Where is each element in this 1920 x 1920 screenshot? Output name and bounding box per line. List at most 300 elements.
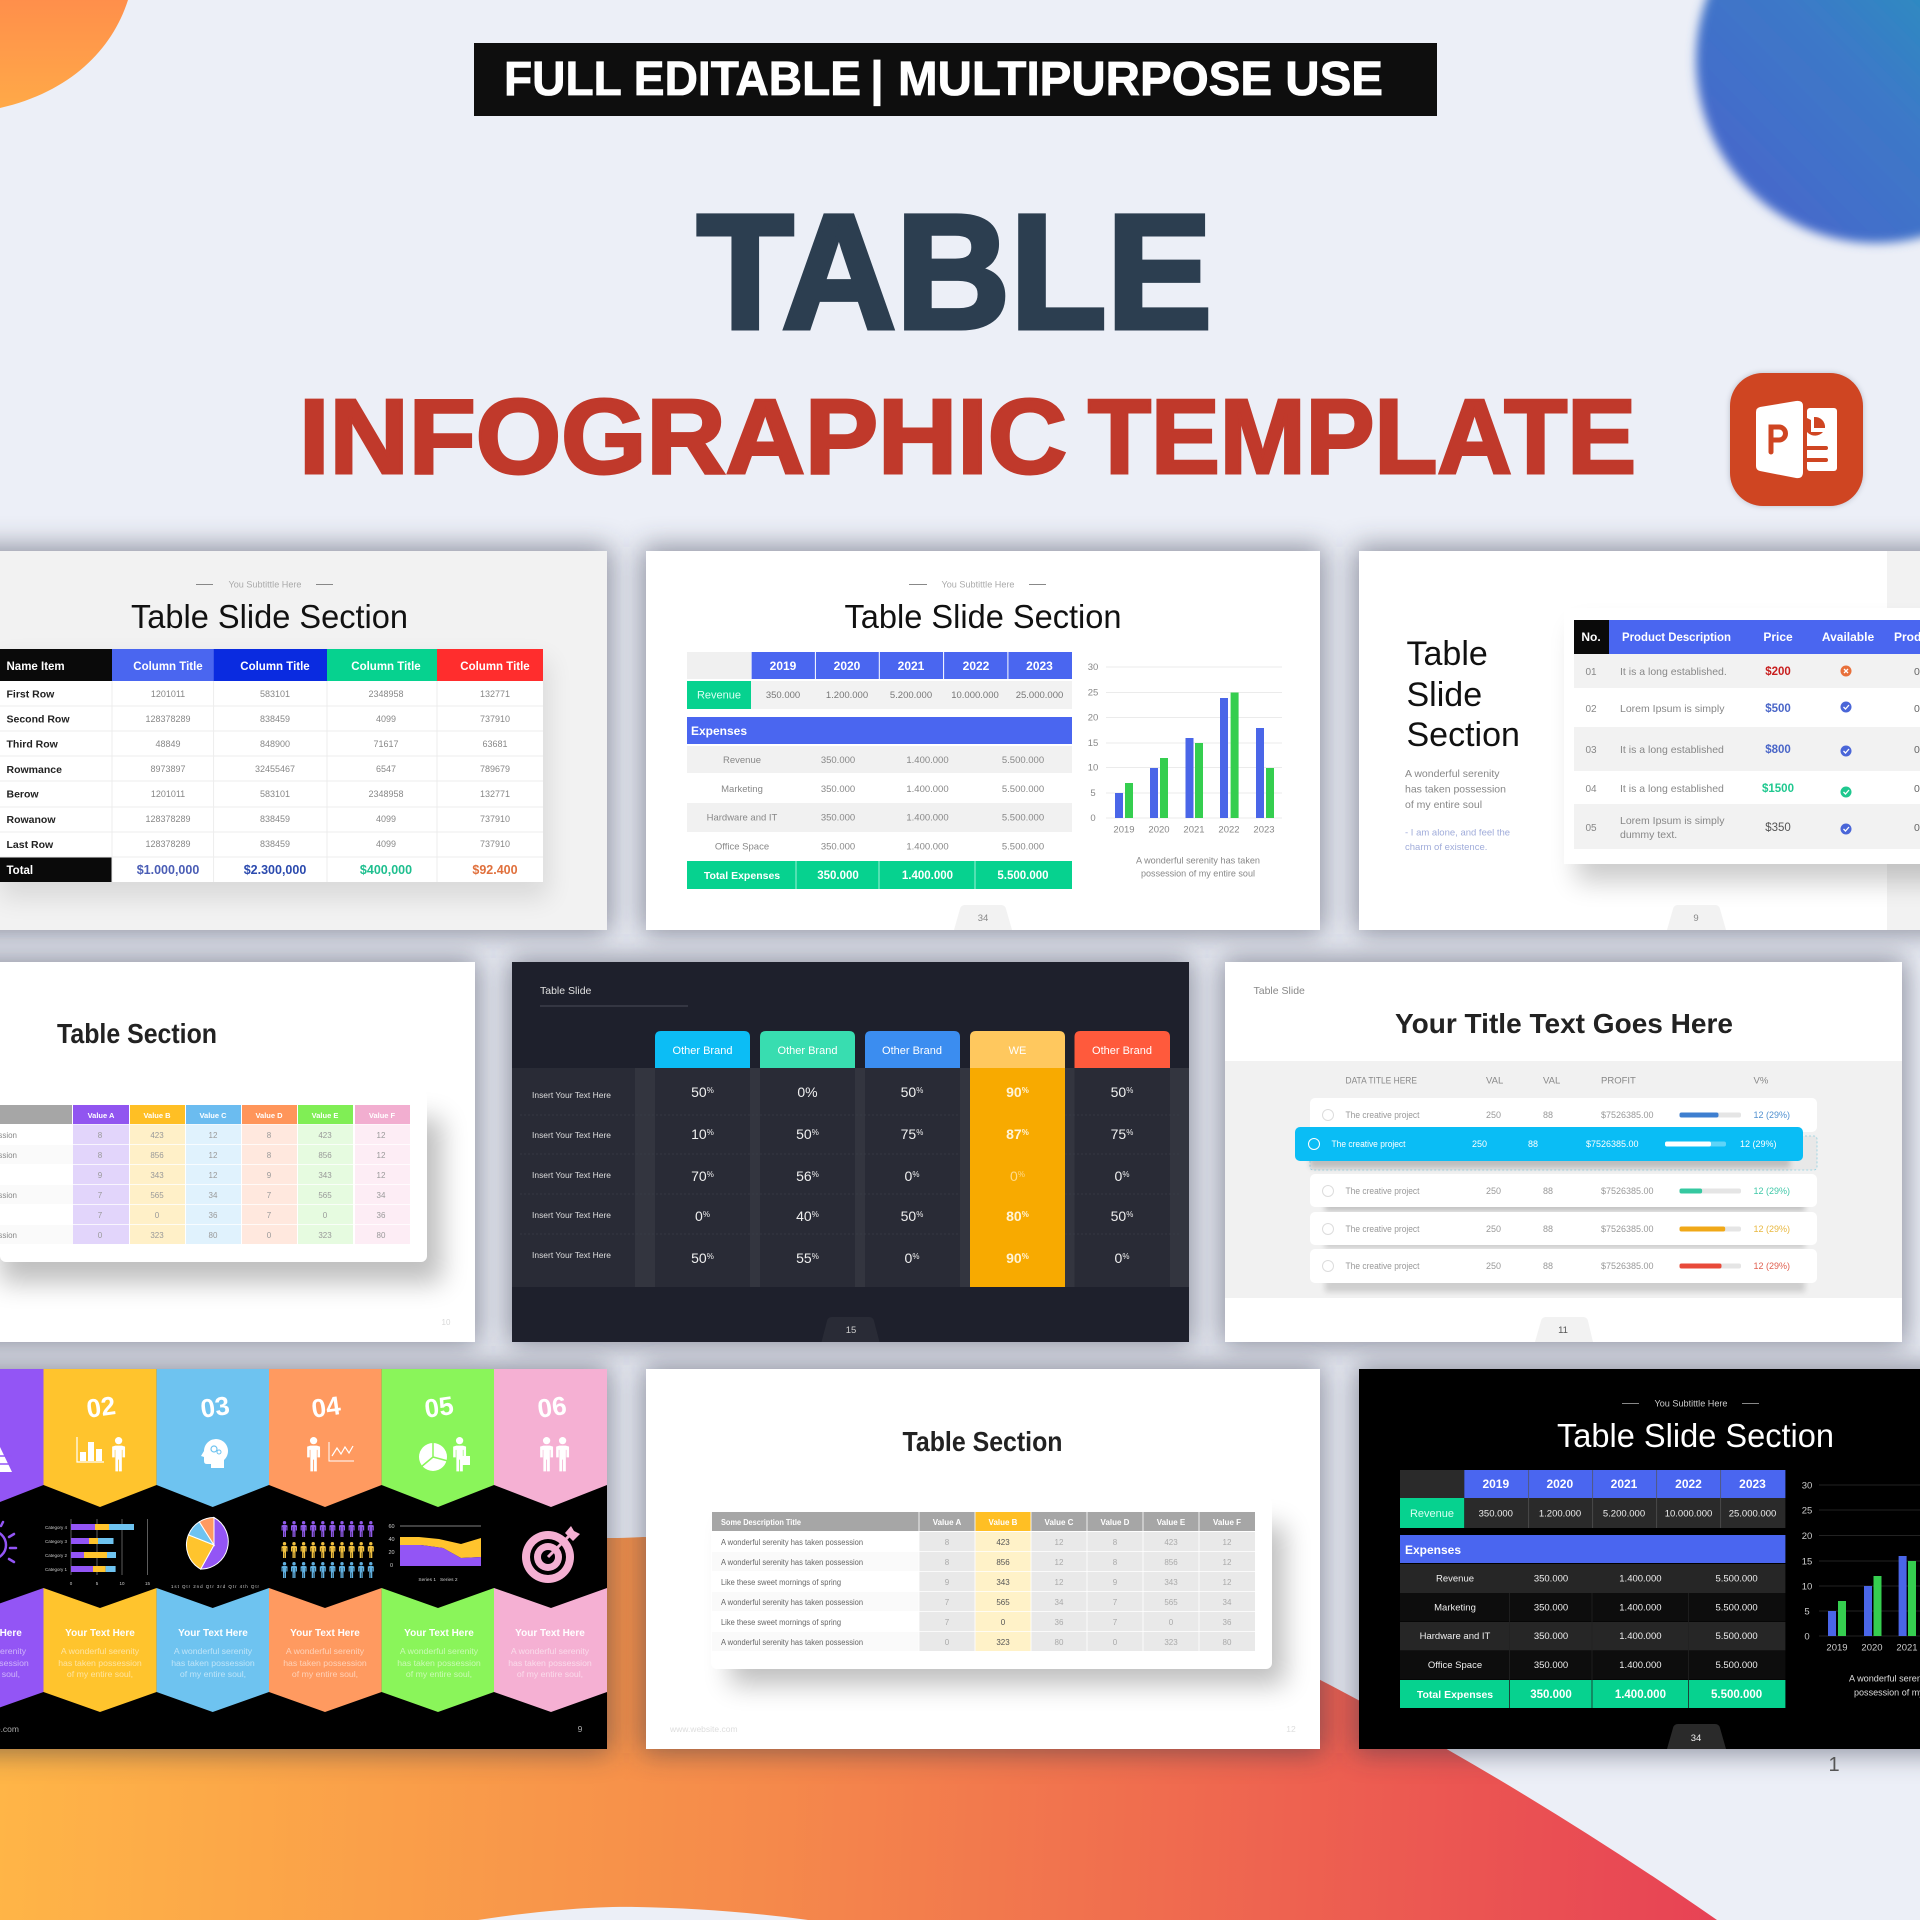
slide 5 table: Insert Your Text Here (532, 1170, 611, 1180)
slide 3 table card: Lorem Ipsum is simply (1620, 703, 1725, 715)
icon: powerpoint logo (1730, 373, 1863, 506)
slide 8 table card: 12 (1223, 1558, 1232, 1567)
slide 5 table: 0 (1010, 1168, 1018, 1184)
chevron numbers: 05 (423, 1390, 455, 1424)
slide 4 table card: 34 (209, 1191, 218, 1200)
slide 6 list: $7526385.00 (1601, 1261, 1654, 1271)
slide 9 table: Office Space (1428, 1660, 1482, 1671)
slide 9 table: 10.000.000 (1665, 1508, 1712, 1520)
banner: full editable: FULL EDITABLE (504, 53, 861, 106)
slide 1 table: Rowanow (6, 814, 56, 826)
slide 4 table card: 343 (318, 1171, 332, 1180)
slide 6 list: $7526385.00 (1601, 1224, 1654, 1234)
slide 6 list: The creative project (1346, 1224, 1420, 1234)
slide 8 table card: 12 (1223, 1578, 1232, 1587)
chart: stacked horizontal bars: Category 4 (45, 1525, 68, 1530)
slide 2 table: Revenue (723, 755, 761, 766)
slide 5 page tab: 15 (846, 1325, 856, 1336)
slide 6 list (1225, 1061, 1902, 1298)
slide 5 table: % (812, 1128, 819, 1137)
slide 8 table card: Value B (989, 1518, 1018, 1527)
slide 5 table: % (1022, 1086, 1029, 1095)
slide 3 table card: $800 (1765, 744, 1791, 756)
chevron captions: Your Text Here (178, 1628, 248, 1639)
slide 3 table card: dummy text. (1620, 829, 1677, 841)
slide 1 table: 848900 (260, 739, 290, 749)
slide 4 table card: 856 (150, 1151, 164, 1160)
slide 6 highlighted row: 88 (1528, 1139, 1538, 1149)
slide 3 table card: 05 (1585, 823, 1597, 834)
slide 9 table: 2019 (1482, 1477, 1509, 1491)
chart: stacked horizontal bars: 5 (96, 1581, 99, 1586)
slide 3 table card: 04 (1585, 784, 1597, 795)
slide 6 list: PROFIT (1601, 1076, 1636, 1086)
slide 1 table: 128378289 (145, 714, 191, 724)
slide 8 table card: 8 (945, 1538, 950, 1547)
slide 1 table: Last Row (6, 839, 54, 851)
slide 5 table: % (707, 1252, 714, 1261)
slide 2 table: 2019 (770, 659, 797, 673)
slide 8 table card: 323 (1164, 1638, 1178, 1647)
chart: area: 60 (388, 1524, 395, 1530)
slide 4 table card: 80 (377, 1231, 386, 1240)
chevron captions: of my entire soul, (517, 1669, 583, 1679)
slide 5 table: % (1022, 1128, 1029, 1137)
slide 5 table: 55 (796, 1250, 812, 1266)
slide 1 table: Column Title (351, 661, 421, 673)
slide 6 page tab (1535, 1317, 1593, 1342)
slide 1 table: 583101 (260, 789, 290, 799)
chart: stacked horizontal bars: Category 1 (45, 1567, 68, 1572)
slide 1 table: $2.300,000 (244, 863, 306, 877)
chevron captions: A wonderful serenity (286, 1646, 365, 1656)
slide 9 bar chart: 5 (1804, 1606, 1810, 1618)
slide 2 table: 350.000 (821, 755, 855, 766)
slide 2 table: 350.000 (821, 784, 855, 795)
icon: chart and person (77, 1437, 125, 1471)
banner: full editable: MULTIPURPOSE USE (898, 53, 1383, 106)
slide 3 table card: 0 (1914, 783, 1920, 795)
chevron captions: of my entire soul, (406, 1669, 472, 1679)
slide 2 bar chart: 2022 (1218, 824, 1240, 836)
slide 5 table: % (707, 1128, 714, 1137)
chevron captions: A wonderful serenity (61, 1646, 140, 1656)
slide 5 table: % (916, 1086, 923, 1095)
chevron captions: has taken possession (58, 1658, 142, 1668)
panel: slide 3 product table (1359, 551, 1920, 930)
slide 4 table card: 565 (150, 1191, 164, 1200)
slide 8 table card: 343 (996, 1578, 1010, 1587)
chart: area: 40 (388, 1537, 395, 1543)
slide 5 table: 0 (1115, 1168, 1122, 1184)
slide 4 table card: 423 (150, 1131, 164, 1140)
slide 4 table card: 12 (209, 1151, 218, 1160)
slide 4 table card: 323 (318, 1231, 332, 1240)
slide 8 table card: Some Description Title (721, 1518, 802, 1527)
slide 6 list: $7526385.00 (1601, 1186, 1654, 1196)
slide 2 page tab: 34 (978, 913, 988, 924)
banner: full editable: | (870, 53, 884, 106)
slide 5 table: 70 (691, 1168, 707, 1184)
chart: stacked horizontal bars: Category 3 (45, 1539, 68, 1544)
slide 1 table: 128378289 (145, 839, 191, 849)
slide 6 list: The creative project (1346, 1261, 1420, 1271)
slide 8 table card: 80 (1055, 1638, 1064, 1647)
slide 8 table card: 8 (1113, 1538, 1118, 1547)
slide 9 table: 350.000 (1534, 1660, 1568, 1671)
slide 3 table card (1564, 608, 1920, 882)
slide 9 table: Revenue (1410, 1508, 1454, 1520)
slide 4 table card: 12 (209, 1131, 218, 1140)
subtitle: infographic template: TEMPLATE (1088, 378, 1636, 496)
slide 6 highlighted row: $7526385.00 (1586, 1139, 1639, 1149)
panel: slide 7 black chevron infographic (0, 1369, 607, 1749)
icon: target with arrow (522, 1526, 580, 1583)
slide 4 table card: Value A (88, 1111, 115, 1120)
slide 8 footer: 12 (1286, 1724, 1296, 1734)
slide 2 table: 2020 (834, 659, 861, 673)
slide 9 bar chart: 2021 (1896, 1642, 1918, 1654)
slide 9 table: 1.400.000 (1615, 1689, 1666, 1701)
slide 9 table: 350.000 (1534, 1574, 1568, 1584)
slide 2 table: 25.000.000 (1016, 690, 1063, 701)
slide 3 paragraph: of my entire soul (1405, 799, 1482, 811)
slide 2 bar chart: 2019 (1113, 824, 1135, 836)
slide 9 subtitle: You Subtittle Here (1654, 1398, 1728, 1408)
slide 2 subtitle (909, 580, 1046, 590)
slide 3 table card: 02 (1585, 704, 1597, 715)
slide 5 table: 0 (695, 1208, 703, 1224)
slide 6 list: 12 (29%) (1754, 1110, 1790, 1120)
slide 6 list: 250 (1486, 1224, 1501, 1234)
chart: stacked horizontal bars: 0 (70, 1581, 73, 1586)
slide 3 paragraph (1405, 768, 1506, 811)
slide 9 table: 350.000 (1534, 1602, 1568, 1614)
slide 1 table: 583101 (260, 689, 290, 699)
slide 9 heading: Table Slide Section (1557, 1417, 1834, 1454)
slide 2 table: 350.000 (821, 842, 855, 852)
slide 3 table card: $500 (1765, 703, 1791, 715)
slide 9 table: 1.400.000 (1619, 1574, 1662, 1584)
slide 9 page tab: 34 (1691, 1733, 1701, 1744)
slide 5 table: 50 (691, 1250, 707, 1266)
slide 2 table (687, 652, 1072, 889)
slide 1 table: 4099 (376, 714, 396, 724)
slide 8 heading: Table Section (902, 1426, 1062, 1457)
slide 1 table: 1201011 (151, 689, 185, 699)
chart: pie: 1st Qtr 2nd Qtr 3rd Qtr 4th Qtr (171, 1584, 260, 1589)
slide 2 bar chart: 30 (1088, 662, 1098, 673)
slide 6 list: 250 (1486, 1261, 1501, 1271)
slide 2 table: 5.500.000 (1002, 755, 1044, 766)
slide 8 table card: 34 (1055, 1598, 1064, 1607)
slide 9 table: 350.000 (1534, 1631, 1568, 1642)
slide 5 table: % (707, 1086, 714, 1095)
slide 3 table card: $200 (1765, 666, 1791, 678)
slide 5 table: % (916, 1128, 923, 1137)
slide 2 bar chart: 25 (1088, 688, 1098, 698)
slide 9 bar chart: 15 (1802, 1556, 1812, 1568)
slide 3 table card: 0 (1914, 666, 1920, 678)
slide 5 table: Insert Your Text Here (532, 1210, 611, 1220)
slide 4 table card: 0 (323, 1211, 328, 1220)
panel: slide 2 table and bar chart (646, 551, 1320, 930)
slide 2 bar chart (1088, 662, 1282, 880)
slide 3 table card: 0 (1914, 703, 1920, 715)
slide 4 heading: Table Section (57, 1018, 217, 1049)
slide 9 table: 1.400.000 (1619, 1631, 1662, 1642)
slide 4 table card: 8 (98, 1131, 103, 1140)
slide 2 table: 1.200.000 (826, 690, 868, 701)
chevron captions: Your Text Here (65, 1628, 135, 1639)
slide 4 table card: 856 (318, 1151, 332, 1160)
slide 2 bar chart: 5 (1090, 788, 1096, 799)
slide 9 table: 2020 (1546, 1477, 1573, 1491)
slide 5 table: % (703, 1210, 710, 1219)
slide 8 table card: A wonderful serenity has taken possession (721, 1638, 863, 1647)
slide 4 table card: 0 (155, 1211, 160, 1220)
slide 8 table card: 80 (1223, 1638, 1232, 1647)
slide 3 table card: No. (1581, 630, 1601, 644)
slide 6 list: 12 (29%) (1754, 1224, 1790, 1234)
slide 6 list: VAL (1543, 1076, 1560, 1086)
slide 8 table card: A wonderful serenity has taken possession (721, 1538, 863, 1547)
slide 4 table card: 8 (267, 1131, 272, 1140)
slide 2 table: 5.500.000 (1002, 842, 1044, 852)
slide 2 table: 2021 (898, 659, 925, 673)
slide 3 table card: Price (1763, 630, 1793, 644)
slide 9 table: 1.400.000 (1619, 1602, 1662, 1614)
slide 4 table card: 12 (377, 1131, 386, 1140)
chart: area (388, 1524, 481, 1583)
slide 6 highlighted row (1295, 1127, 1803, 1161)
slide 5 table: % (1126, 1128, 1133, 1137)
slide 5 table: 75 (901, 1126, 916, 1142)
chevrons bottom row (0, 1588, 607, 1712)
slide 8 table card: 0 (1001, 1618, 1006, 1627)
slide 1 table: 2348958 (368, 789, 404, 799)
slide 1 table: 32455467 (255, 764, 295, 774)
slide 9 table: 5.500.000 (1715, 1660, 1758, 1671)
slide 9 bar chart: 2019 (1826, 1642, 1848, 1654)
slide 6 list: DATA TITLE HERE (1346, 1076, 1417, 1086)
slide 9 table: 2023 (1739, 1477, 1766, 1491)
slide 5 table: 0% (797, 1084, 818, 1100)
slide 8 table card: 7 (945, 1618, 950, 1627)
slide 4 table card: 80 (209, 1231, 218, 1240)
chevron numbers: 04 (310, 1390, 343, 1424)
slide 2 table: 5.500.000 (1002, 784, 1044, 795)
slide 4 table card: Value F (369, 1111, 396, 1120)
slide 1 table: 838459 (260, 839, 290, 849)
slide 5 table: 10 (691, 1126, 707, 1142)
slide 2 table: 1.400.000 (906, 812, 949, 824)
slide 2 bar chart: 2023 (1253, 824, 1275, 836)
slide 3 heading: Section (1406, 716, 1520, 754)
slide 3 table card: 0 (1914, 744, 1920, 756)
slide 9 bar chart: 10 (1802, 1582, 1812, 1592)
slide 9 subtitle (1622, 1398, 1759, 1408)
slide 1 table: Second Row (6, 714, 70, 726)
slide 9 table: 25.000.000 (1729, 1508, 1776, 1520)
chart: stacked horizontal bars: 15 (145, 1581, 150, 1586)
slide 8 table card: 36 (1055, 1618, 1064, 1627)
chevron captions: has taken possession (397, 1658, 481, 1668)
slide 4 table card: Value C (199, 1111, 227, 1120)
slide 1 table: 789679 (480, 764, 510, 774)
slide 5 table: 0 (1115, 1250, 1122, 1266)
slide 6 list: 12 (29%) (1754, 1186, 1790, 1196)
slide 3 heading: Slide (1406, 676, 1482, 714)
slide 8 table card: 8 (1113, 1558, 1118, 1567)
slide 5 table: 50 (1111, 1084, 1126, 1100)
chart: pie (171, 1518, 260, 1589)
slide 5 table: 0 (905, 1168, 912, 1184)
slide 9 bar chart (1802, 1480, 1920, 1698)
slide 9 bar chart: 0 (1804, 1632, 1810, 1642)
slide 8 table card: Value F (1213, 1518, 1241, 1527)
slide 2 heading: Table Slide Section (844, 598, 1122, 635)
slide 1 table: 737910 (480, 839, 510, 849)
slide 8 table card: 565 (996, 1598, 1010, 1607)
slide 5 table: 0 (905, 1250, 912, 1266)
slide 8 table card: Value E (1157, 1518, 1186, 1527)
slide 8 table card: 856 (1164, 1558, 1178, 1567)
slide 5 table: % (912, 1252, 919, 1261)
slide 2 table: Office Space (715, 842, 769, 852)
slide 8 table card: A wonderful serenity has taken possession (721, 1558, 863, 1567)
chart: stacked horizontal bars: 10 (119, 1581, 125, 1586)
slide 3 page tab (1667, 905, 1726, 930)
slide 8 table card: A wonderful serenity has taken possession (721, 1598, 863, 1607)
chevron captions: Your Text Here (290, 1628, 360, 1639)
slide 4 table card: 9 (98, 1171, 103, 1180)
slide 8 table card: 9 (945, 1578, 950, 1587)
slide 5 table: % (812, 1170, 819, 1179)
slide 8 table card: 423 (996, 1538, 1010, 1547)
chart: light bulb (0, 1522, 16, 1562)
slide 9 table: 2021 (1611, 1477, 1638, 1491)
slide 1 table: 838459 (260, 814, 290, 824)
slide 3 note: charm of existence. (1405, 842, 1487, 853)
slide 8 table card: Value D (1101, 1518, 1130, 1527)
slide 1 table: 8973897 (150, 764, 186, 774)
slide 9 table: 350.000 (1530, 1689, 1572, 1701)
slide 9 table: Hardware and IT (1420, 1631, 1491, 1642)
slide 1 table: 737910 (480, 814, 510, 824)
slide 4 table card: 565 (318, 1191, 332, 1200)
chevron captions: Your Text Here (404, 1628, 474, 1639)
slide 8 table card: 12 (1055, 1578, 1064, 1587)
slide 4 table card: 7 (98, 1211, 103, 1220)
panel: slide 5 dark brand comparison (512, 962, 1189, 1342)
slide 1 table: 4099 (376, 839, 396, 849)
slide 2 table: 1.400.000 (906, 755, 949, 766)
banner: full editable (474, 43, 1437, 116)
slide 1 table: $92.400 (472, 863, 518, 877)
slide 2 table: 5.500.000 (997, 870, 1049, 882)
slide 5 table: 75 (1111, 1126, 1126, 1142)
icon: pyramid (0, 1447, 12, 1472)
chevron numbers: 02 (85, 1390, 117, 1424)
slide 4 table card: 0 (98, 1231, 103, 1240)
slide 5 table: WE (1009, 1045, 1026, 1057)
slide 5 table: % (916, 1210, 923, 1219)
decorative gradient blob bottom (0, 1537, 1717, 1920)
slide 3 page tab: 9 (1693, 913, 1699, 924)
chevron captions: A wonderful serenity (400, 1646, 479, 1656)
slide 2 table: Hardware and IT (707, 812, 778, 824)
slide 9 table: 1.400.000 (1619, 1660, 1662, 1671)
slide 4 table card: 12 (377, 1151, 386, 1160)
slide 2 table: 2022 (963, 659, 990, 673)
slide 4 page number: 10 (442, 1318, 451, 1327)
slide 3 table card: $1500 (1762, 783, 1794, 795)
slide 5 table: 87 (1006, 1126, 1022, 1142)
slide shadows (0, 547, 1920, 1753)
slide 6 list: 88 (1543, 1261, 1553, 1271)
chart: stacked horizontal bars (45, 1519, 150, 1586)
slide 5 table: Other Brand (882, 1045, 942, 1057)
slide 2 page tab (954, 905, 1012, 930)
slide 6 highlighted row: 250 (1472, 1139, 1487, 1149)
slide 5 table: % (1126, 1086, 1133, 1095)
panel: slide 9 dark table and chart (1359, 1369, 1920, 1749)
chart: stacked horizontal bars: Category 2 (45, 1553, 68, 1558)
slide 5 table: % (912, 1170, 919, 1179)
slide 9 table: Revenue (1436, 1574, 1474, 1584)
slide 8 table card: 423 (1164, 1538, 1178, 1547)
slide 2 table: Expenses (691, 724, 747, 738)
slide 5 table: % (1022, 1210, 1029, 1219)
slide 1 table: 4099 (376, 814, 396, 824)
chart: pictogram people (282, 1521, 374, 1578)
slide 5 table: Insert Your Text Here (532, 1130, 611, 1140)
slide 3 table card: Product Description (1622, 630, 1731, 644)
slide 5 table: 50 (796, 1126, 812, 1142)
slide 6 list: The creative project (1346, 1186, 1420, 1196)
slide 6 list: 250 (1486, 1110, 1501, 1120)
slide 6 list: $7526385.00 (1601, 1110, 1654, 1120)
slide 8 table card: 34 (1223, 1598, 1232, 1607)
slide 2 bar chart: 15 (1088, 738, 1098, 749)
panel: slide 4 pastel columns table (0, 962, 475, 1342)
slide 5 table: Other Brand (778, 1045, 837, 1057)
slide 4 table card: Value B (143, 1111, 171, 1120)
slide 1 table: 48849 (155, 739, 181, 749)
slide 4 table card: 8 (98, 1151, 103, 1160)
slide 3 paragraph: has taken possession (1405, 784, 1506, 796)
slide 6 list: V% (1754, 1076, 1769, 1086)
slide 6 list: 250 (1486, 1186, 1501, 1196)
slide 1 table: $1.000,000 (137, 863, 199, 877)
slide 9 table: 5.500.000 (1715, 1574, 1758, 1584)
chevron captions: has taken possession (283, 1658, 367, 1668)
slide 5 table: 50 (1111, 1208, 1126, 1224)
slide 2 bar chart: 0 (1090, 813, 1096, 824)
slide 7 footer: 9 (578, 1724, 583, 1734)
decorative blue circle top right (1696, 0, 1920, 243)
chevron captions: A wonderful serenity (174, 1646, 253, 1656)
slide 2 table: 350.000 (817, 870, 859, 882)
slide 2 table: Revenue (697, 690, 741, 702)
page number: 1 (1828, 1754, 1840, 1776)
decorative orange circle top left (0, 0, 128, 108)
panel: slide 6 project list (1225, 962, 1902, 1342)
slide 2 table: 2023 (1026, 659, 1053, 673)
slide 1 table: Column Title (240, 661, 310, 673)
slide 5 table (512, 1031, 1189, 1287)
